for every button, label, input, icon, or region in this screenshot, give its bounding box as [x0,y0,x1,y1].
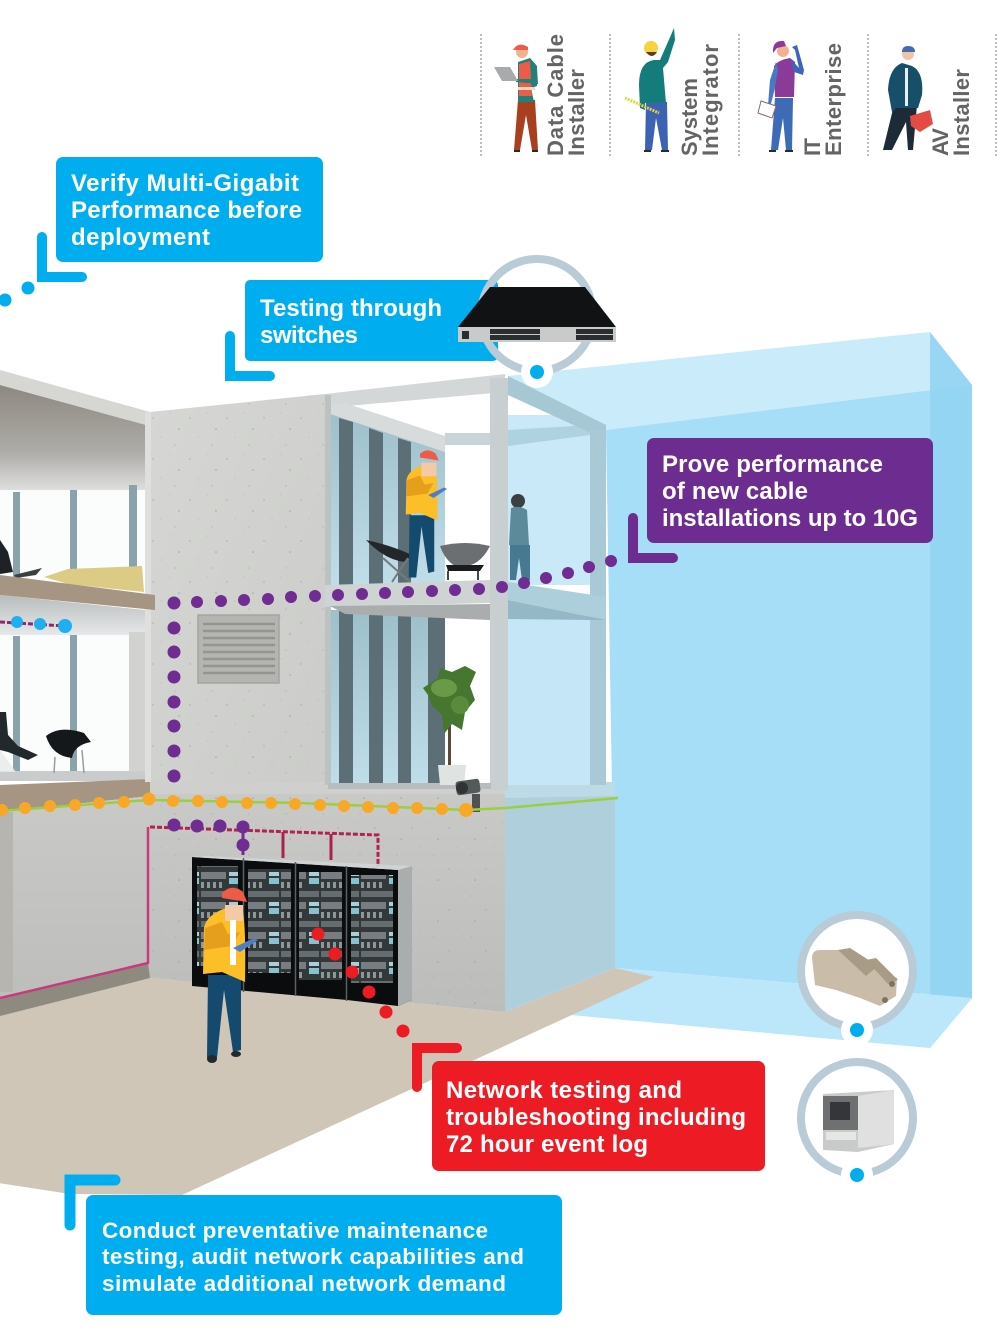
worker on upper floor [406,450,447,578]
building: lower left wing [0,595,155,812]
callout: verify performance: Performance before [71,197,302,224]
concrete frame [325,374,606,790]
callout: testing through switches: Testing through [260,295,442,322]
role: system integrator [625,28,723,156]
callout: prove performance: installations up to 10G [662,505,918,532]
lower left wall [0,796,150,1016]
security camera [455,778,481,812]
callout: preventative maintenance [70,1180,562,1315]
brown floor slab upper [0,575,155,610]
seated person [0,712,38,760]
icon: fibre connector in ring [801,915,913,1046]
role: data cable installer: Installer [564,69,589,156]
callout: preventative maintenance: testing, audit network capabilities and [102,1244,524,1269]
callout: prove performance: Prove performance [662,451,883,478]
orange dotted route [0,792,473,817]
lounge chairs [366,540,490,582]
callout: prove performance: of new cable [662,478,808,505]
callout: testing through switches [230,280,498,376]
server racks [192,856,412,1006]
green data line [0,798,618,811]
building: upper left wing [0,370,150,592]
role: IT enterprise: IT [800,137,825,156]
purple dotted route [168,555,617,852]
plant [423,666,476,785]
basement wall [150,782,615,1012]
callout: verify performance: Verify Multi-Gigabit [71,170,299,197]
role: AV installer: AV [928,128,953,156]
woman silhouette [509,494,530,580]
callout: preventative maintenance: Conduct preventative maintenance [102,1218,488,1243]
floor [0,968,654,1195]
callout: preventative maintenance: simulate additional network demand [102,1271,506,1296]
audience header [481,28,996,157]
callout: network testing: troubleshooting including [446,1104,746,1131]
black chair [46,730,91,773]
callout: network testing [417,1048,765,1171]
role: IT enterprise: Enterprise [821,43,846,156]
sofa [44,566,144,592]
pink cable route [0,827,378,998]
icon: RJ45 jack in ring [801,1062,913,1191]
concrete core wall [145,394,330,790]
callout: network testing: 72 hour event log [446,1131,648,1158]
glass facade with interior [330,410,591,785]
person seated upper [0,540,13,574]
role: IT enterprise [758,41,846,156]
role: AV installer [883,46,974,156]
upper left cable with blue dots [0,616,72,633]
role: system integrator: Integrator [698,44,723,156]
callout: network testing: Network testing and [446,1077,682,1104]
red dotted route [312,928,410,1038]
callout: testing through switches: switches [260,322,358,349]
callout: prove performance [633,438,933,558]
blue glass volume [508,332,972,1048]
vent grille [198,615,279,683]
blue dots upper left [0,282,34,306]
role: system integrator: System [677,78,702,156]
callout: verify performance: deployment [71,224,210,251]
role: AV installer: Installer [949,69,974,156]
role: data cable installer: Data Cable [543,34,568,156]
worker at racks [203,888,258,1063]
role: data cable installer [494,34,589,156]
icon: network switch in ring [458,259,616,388]
callout: verify performance [42,157,323,277]
